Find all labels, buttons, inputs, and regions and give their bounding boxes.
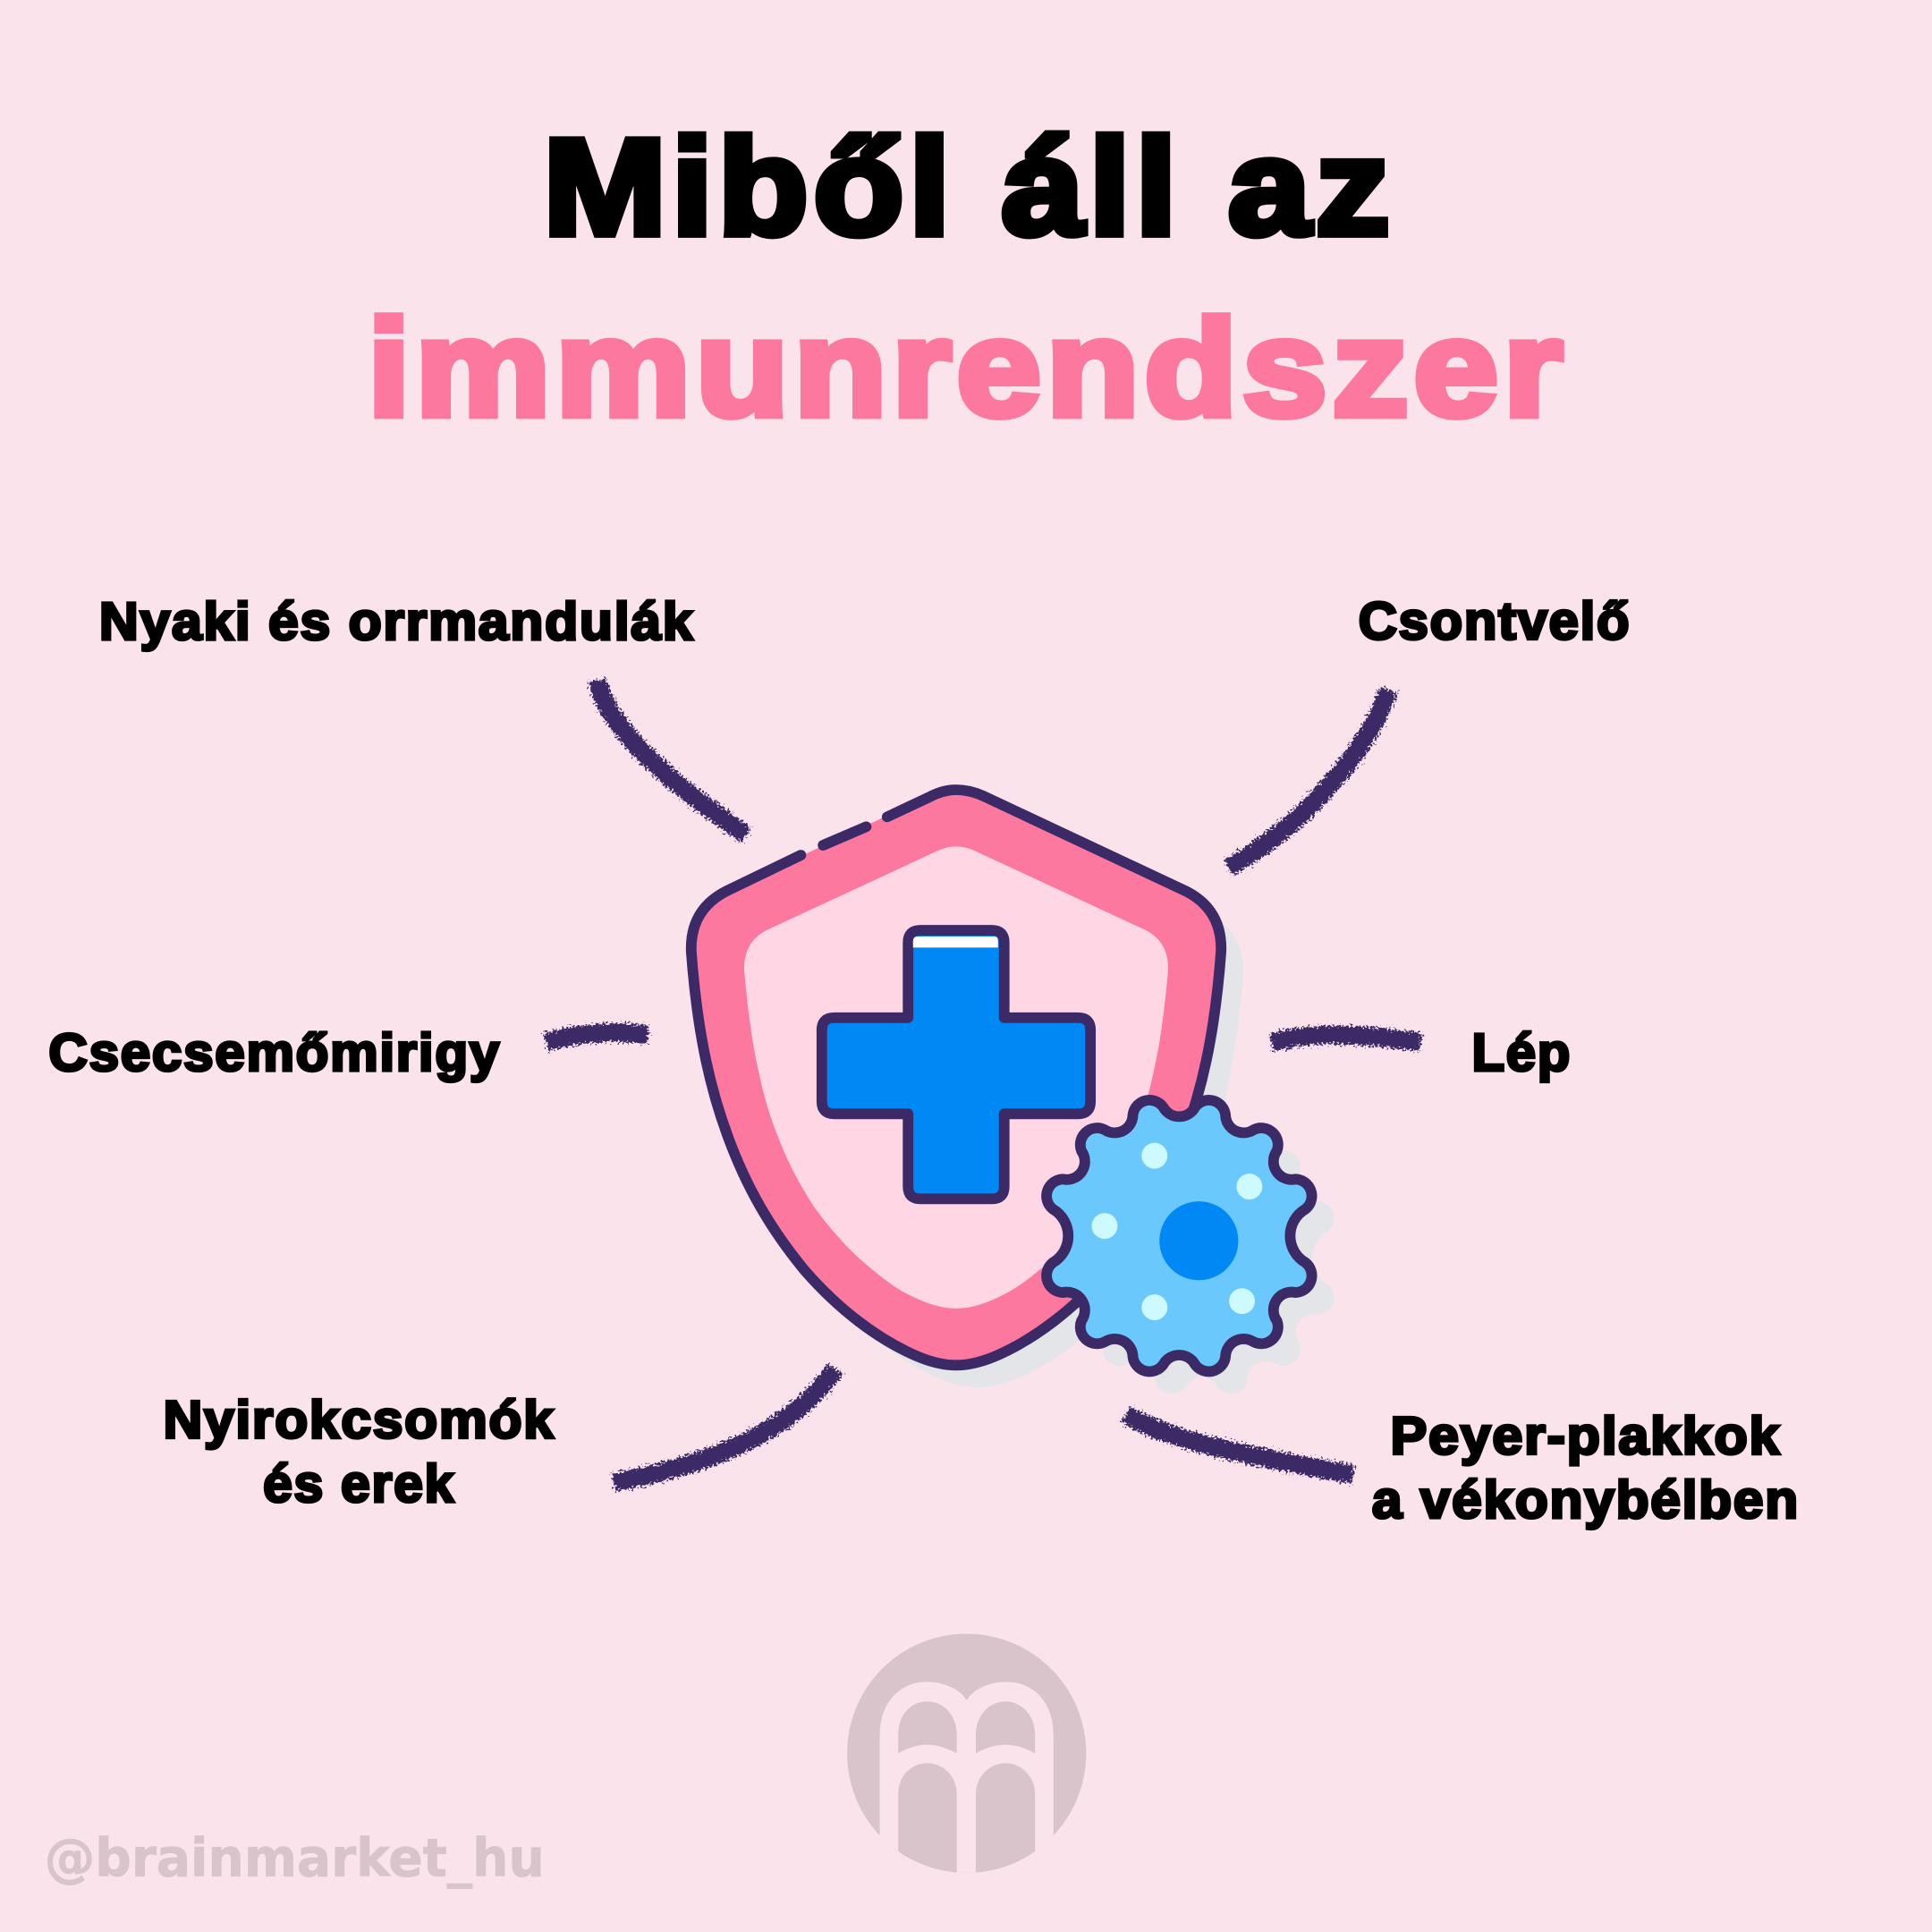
microbe shadow <box>1069 1123 1334 1394</box>
microbe <box>1046 1100 1312 1371</box>
shield outline <box>691 790 1221 1365</box>
connector: Nyaki és orrmandulák <box>597 680 747 835</box>
label: Peyer-plakkok a vékonybélben: Peyer-plakkok <box>1391 1406 1781 1466</box>
title <box>368 112 1568 445</box>
label: Nyirokcsomók és erek: és erek <box>263 1453 455 1513</box>
shield rim <box>691 790 1221 1365</box>
title line 1: Miből áll az <box>544 112 1394 264</box>
label: Csecsemőmirigy: Csecsemőmirigy <box>48 1022 501 1082</box>
connector: Lép <box>1272 1035 1420 1042</box>
label: Nyaki és orrmandulák: Nyaki és orrmandulák <box>99 591 694 651</box>
labels <box>48 590 1800 1530</box>
medical cross <box>822 930 1090 1199</box>
logo <box>847 1634 1086 1885</box>
label: Csontvelő: Csontvelő <box>1359 590 1631 650</box>
spots <box>1092 1143 1262 1320</box>
icon: shield with cross and microbe <box>691 790 1334 1394</box>
label: Peyer-plakkok a vékonybélben: a vékonybélben <box>1372 1470 1800 1530</box>
connector strokes <box>546 680 1420 1482</box>
connector: Csecsemőmirigy <box>546 1032 648 1042</box>
nucleus <box>1159 1201 1238 1280</box>
label: Nyirokcsomók és erek <box>164 1390 555 1513</box>
title line 2: immunrendszer <box>368 292 1568 445</box>
shield inner <box>744 846 1168 1309</box>
connector: Nyirokcsomók <box>614 1368 835 1482</box>
watermark handle: @brainmarket_hu <box>45 1826 545 1888</box>
label: Lép: Lép <box>1471 1022 1572 1082</box>
label: Nyirokcsomók és erek: Nyirokcsomók <box>164 1390 555 1450</box>
shield shadow <box>714 812 1243 1387</box>
connector: Peyer-plakkok <box>1126 1414 1353 1475</box>
label: Peyer-plakkok a vékonybélben <box>1372 1406 1800 1530</box>
connector: Csontvelő <box>1228 690 1388 868</box>
